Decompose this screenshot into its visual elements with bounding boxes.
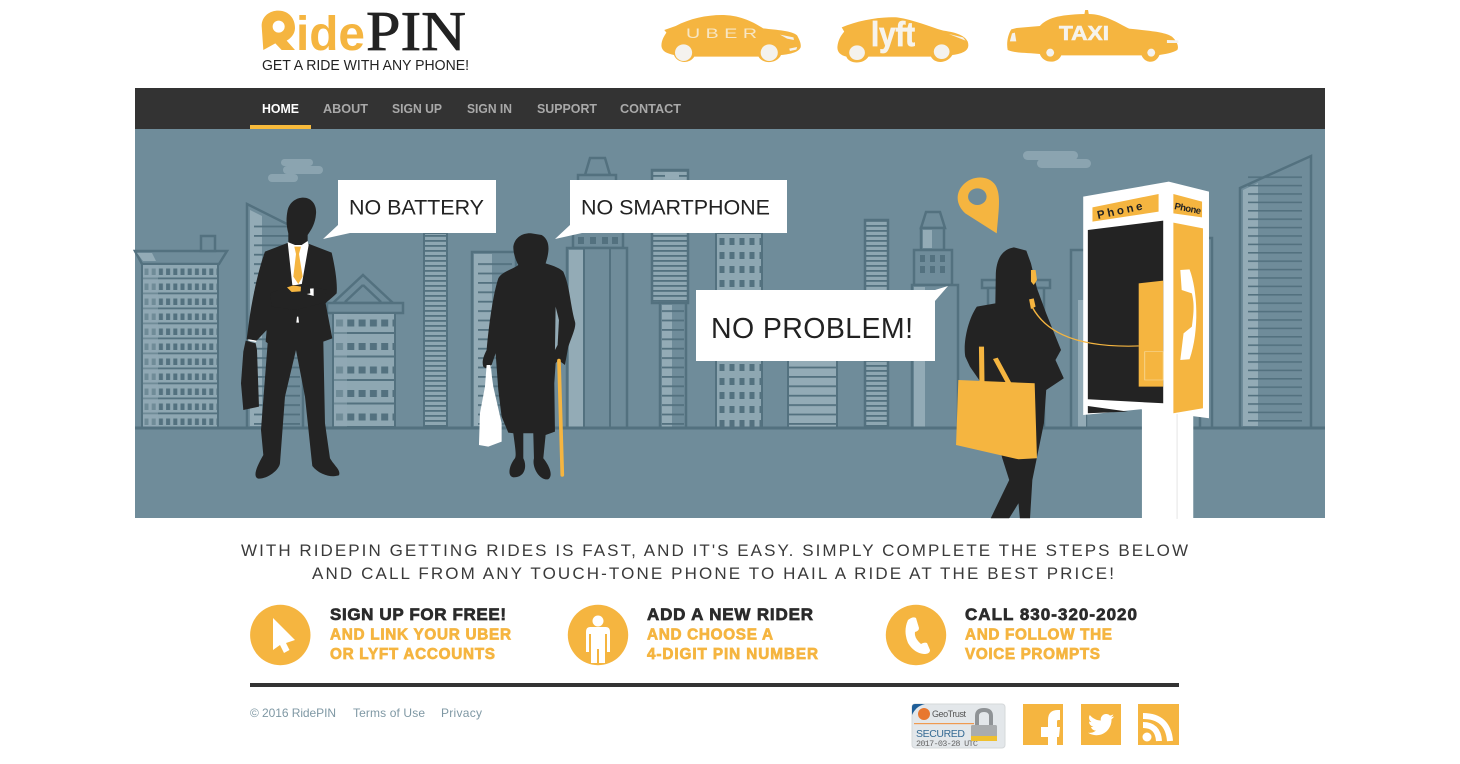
intro text: WITH RIDEPIN GETTING RIDES IS FAST, AND IT'S EASY. SIMPLY COMPLETE THE STEPS BELOW (241, 541, 1188, 560)
cloud left (268, 159, 323, 182)
facebook icon (1023, 704, 1063, 745)
icon: person (568, 605, 628, 665)
hero illustration panel (135, 129, 1325, 519)
footer links: Terms of Use (353, 706, 425, 720)
ground line (135, 426, 1325, 430)
uber label: UBER (686, 26, 757, 41)
nav home: HOME (262, 101, 299, 116)
nav about: ABOUT (323, 101, 368, 116)
active tab underline (250, 125, 311, 129)
nav sign in: SIGN IN (467, 101, 512, 116)
briefcase (241, 341, 259, 410)
location pin (958, 177, 999, 233)
uber car (661, 15, 801, 62)
speech bubble: no battery: NO BATTERY (349, 196, 484, 220)
nav support: SUPPORT (537, 101, 597, 116)
footer links: © 2016 RidePIN (250, 706, 336, 720)
footer rule (250, 683, 1179, 687)
speech bubble: no battery (323, 180, 496, 239)
phone booth (1083, 182, 1209, 519)
speech bubble: no smartphone (555, 180, 787, 239)
nav contact: CONTACT (620, 101, 681, 116)
cane (559, 361, 562, 475)
twitter icon (1081, 704, 1121, 745)
woman on phone (956, 247, 1139, 518)
step 3 text: CALL 830-320-2020 (965, 605, 1137, 624)
step 2 text: AND CHOOSE A (647, 626, 773, 644)
navigation bar (135, 88, 1325, 129)
step 1 text (330, 605, 511, 663)
footer links: Privacy (441, 706, 482, 720)
phone cord (1032, 307, 1139, 346)
step 3 text: AND FOLLOW THE (965, 626, 1112, 644)
step 1 text: AND LINK YOUR UBER (330, 626, 511, 644)
step 3 text: VOICE PROMPTS (965, 646, 1100, 663)
handset at ear (1029, 270, 1037, 309)
icon: cursor (250, 605, 310, 665)
tagline: GET A RIDE WITH ANY PHONE! (262, 57, 469, 74)
businessman silhouette (241, 198, 339, 479)
intro text: AND CALL FROM ANY TOUCH-TONE PHONE TO HAIL A RIDE AT THE BEST PRICE! (312, 564, 1114, 583)
taxi label: TAXI (1059, 23, 1109, 45)
step 1 text: SIGN UP FOR FREE! (330, 605, 506, 624)
geotrust badge: SECURED (916, 728, 965, 740)
nav sign up: SIGN UP (392, 101, 442, 116)
speech bubble: no smartphone: NO SMARTPHONE (581, 196, 770, 220)
footer links (250, 706, 482, 720)
step 3 text (965, 605, 1137, 663)
speech bubble: no problem: NO PROBLEM! (711, 313, 913, 345)
cloud right (1023, 151, 1091, 168)
shopping bag (479, 365, 502, 447)
booth side sign: Phone (1173, 201, 1202, 217)
skyline buildings (135, 156, 1311, 428)
logo pin R (262, 11, 295, 50)
step 2 text (647, 605, 818, 663)
step 1 text: OR LYFT ACCOUNTS (330, 646, 495, 663)
icon: phone (886, 605, 946, 665)
rss icon (1138, 704, 1179, 745)
logo text PIN: PIN (366, 1, 466, 63)
geotrust badge (912, 704, 1005, 749)
intro text (241, 541, 1188, 583)
geotrust badge: 2017-03-28 UTC (916, 739, 978, 749)
taxi car (1007, 10, 1178, 62)
step 2 text: ADD A NEW RIDER (647, 605, 813, 624)
tote bag (956, 347, 1037, 459)
step 3: call (886, 605, 1137, 665)
step 2: add rider (568, 605, 818, 665)
booth front sign: Phone (1096, 201, 1144, 222)
logo text Ride: ide (296, 8, 365, 61)
padlock (971, 710, 997, 741)
speech bubble: no problem (696, 286, 948, 361)
logo (262, 1, 469, 74)
lyft label: lyft (871, 16, 915, 54)
lyft car (837, 16, 968, 63)
elderly woman silhouette (479, 233, 575, 479)
step 2 text: 4-DIGIT PIN NUMBER (647, 646, 818, 663)
step 1: sign up (250, 605, 511, 665)
geotrust badge: GeoTrust (932, 709, 966, 719)
